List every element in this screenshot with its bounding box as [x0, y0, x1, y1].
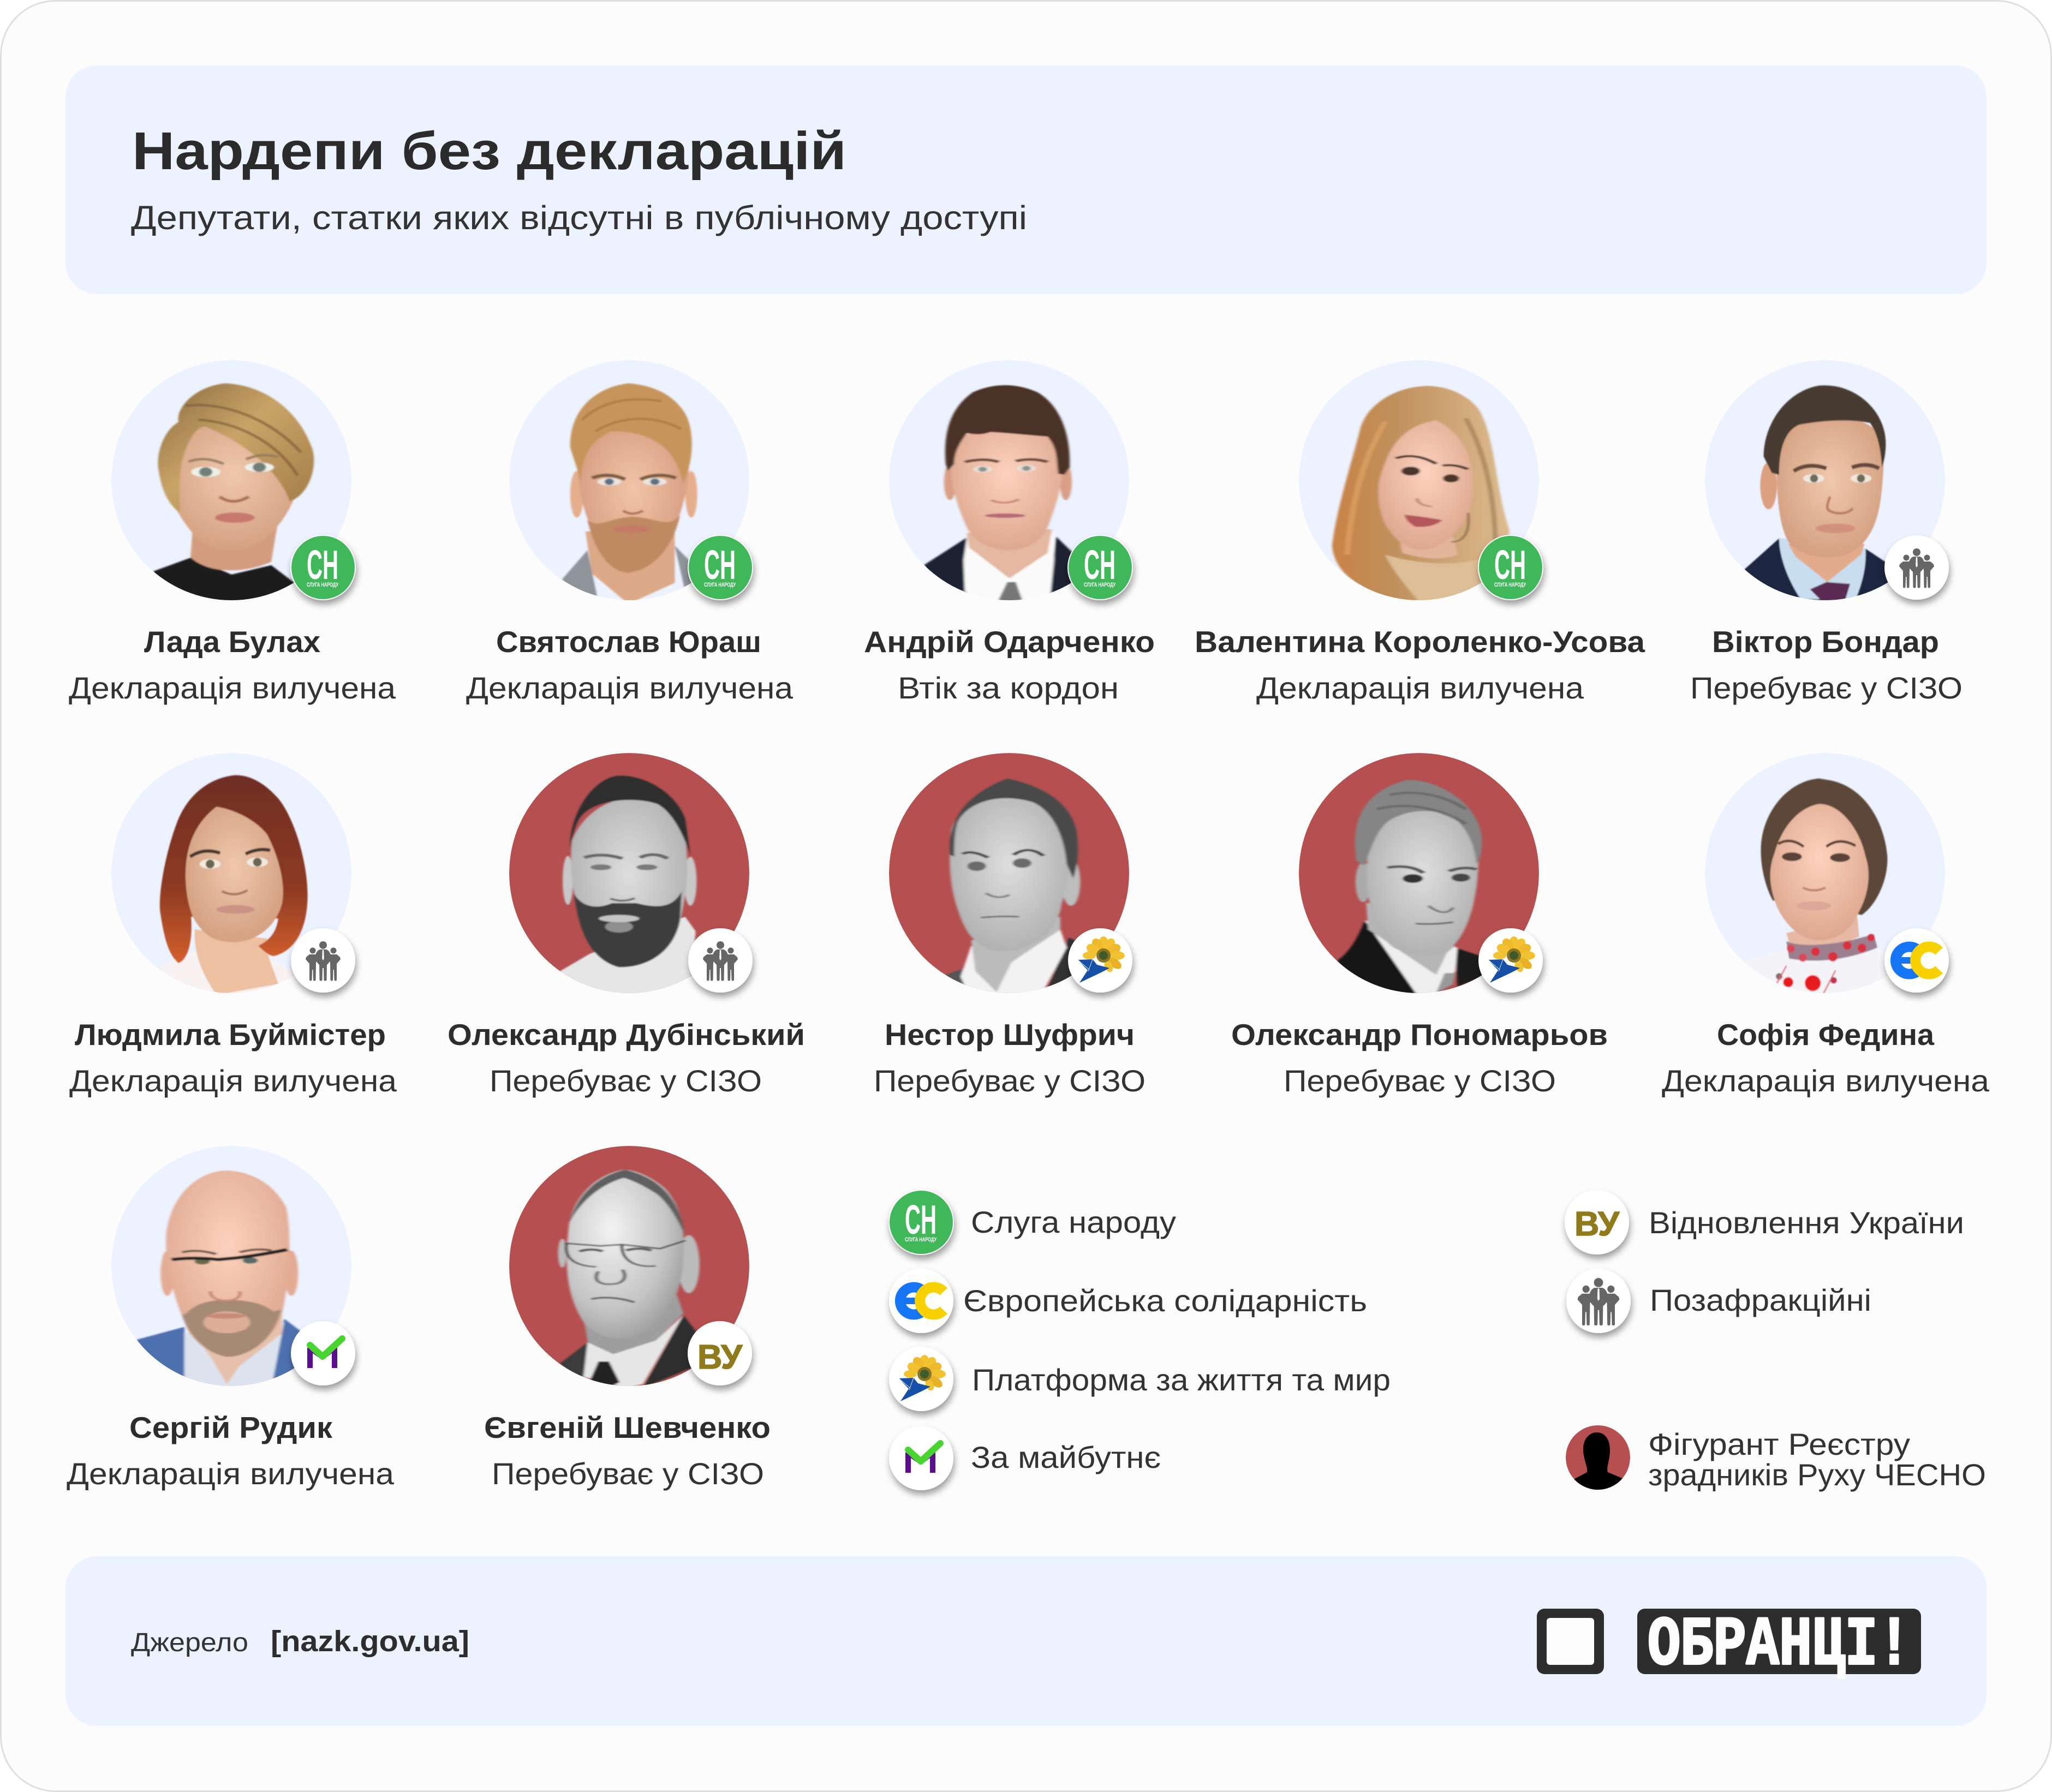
name: Євгеній Шевченко: [484, 1411, 771, 1444]
photo: [111, 753, 351, 995]
legend item: Європейська солідарність: Європейська солідарність: [963, 1283, 1367, 1318]
party badge: Позафракційні: [291, 928, 355, 993]
person: Лада Булах: [69, 360, 396, 705]
source link: [nazk.gov.ua]: [271, 1625, 469, 1658]
legend item: За майбутнє: За майбутнє: [971, 1440, 1161, 1474]
status: Декларація вилучена: [67, 1456, 395, 1491]
status: Декларація вилучена: [69, 671, 396, 705]
party badge: Слуга народу: СЛУГА НАРОДУ: [1084, 582, 1116, 588]
party badge: Слуга народу: СН: [1084, 542, 1116, 588]
name: Андрій Одарченко: [864, 625, 1155, 659]
legend item: За майбутнє: [889, 1426, 1161, 1490]
party badge: Слуга народу: СЛУГА НАРОДУ: [704, 582, 736, 588]
photo: [1705, 360, 1945, 602]
photo: [1299, 753, 1539, 995]
photo: [111, 360, 351, 606]
legend item: Платформа за життя та мир: Платформа за життя та мир: [972, 1363, 1391, 1397]
logo wordmark: ОБРАНЦІ!: [1648, 1606, 1911, 1685]
status: Декларація вилучена: [1662, 1064, 1990, 1098]
legend item: Слуга народу: Слуга народу: [971, 1205, 1176, 1239]
name: Святослав Юраш: [496, 625, 761, 659]
person: Нестор Шуфрич: [874, 753, 1146, 1098]
person: Віктор Бондар: [1690, 360, 1962, 705]
legend item: Платформа за життя та мир: [889, 1347, 1391, 1411]
status: Перебуває у СІЗО: [1690, 671, 1962, 705]
status: Втік за кордон: [898, 671, 1119, 705]
legend item: Позафракційні: Позафракційні: [1650, 1283, 1871, 1317]
person: Олександр Пономарьов: [1231, 753, 1608, 1098]
party badge: Слуга народу: СН: [704, 542, 736, 588]
person: Валентина Короленко-Усова: [1195, 360, 1645, 705]
status: Перебуває у СІЗО: [492, 1456, 764, 1491]
photo: [509, 360, 749, 604]
person: Людмила Буймістер: [69, 753, 397, 1098]
legend item: Відновлення України: Відновлення України: [1649, 1205, 1964, 1240]
status: Перебуває у СІЗО: [874, 1064, 1146, 1098]
photo: [509, 1146, 749, 1388]
legend item: Відновлення України: ВУ: [1574, 1205, 1620, 1243]
legend item: Слуга народу: СН: [905, 1197, 936, 1243]
photo: [1299, 360, 1539, 602]
party badge: Слуга народу: [688, 535, 753, 600]
legend item: Слуга народу: СЛУГА НАРОДУ: [905, 1237, 936, 1243]
party badge: Слуга народу: [1478, 535, 1543, 600]
party badge: Відновлення України: [688, 1321, 752, 1385]
party badge: Слуга народу: СН: [1494, 542, 1526, 588]
person: Євгеній Шевченко: [484, 1146, 771, 1491]
photo: [889, 753, 1129, 995]
party badge: Платформа за життя та мир: [1478, 928, 1543, 993]
name: Валентина Короленко-Усова: [1195, 625, 1645, 659]
legend: [889, 1190, 1986, 1492]
party badge: Відновлення України: ВУ: [697, 1339, 743, 1376]
photo: [509, 753, 749, 995]
party badge: Позафракційні: [688, 928, 753, 993]
photo: [111, 1146, 351, 1388]
person: Софія Федина: [1662, 753, 1990, 1098]
legend item: Відновлення України: [1565, 1190, 1964, 1255]
name: Лада Булах: [144, 625, 320, 659]
legend item: Фігурант Реєстру зрадників Руху ЧЕСНО: Фігурант Реєстру: [1648, 1427, 1910, 1461]
title: Нардепи без декларацій: [132, 121, 846, 181]
name: Софія Федина: [1717, 1018, 1934, 1052]
status: Декларація вилучена: [69, 1064, 397, 1098]
name: Віктор Бондар: [1712, 625, 1939, 659]
name: Олександр Дубінський: [448, 1018, 805, 1052]
source label: Джерело: [131, 1628, 248, 1657]
legend item: Слуга народу: [889, 1190, 1176, 1255]
photo: [889, 360, 1129, 602]
name: Сергій Рудик: [129, 1411, 332, 1444]
footer panel: [65, 1556, 1987, 1726]
legend item: Фігурант Реєстру зрадників Руху ЧЕСНО: зрадників Руху ЧЕСНО: [1648, 1458, 1986, 1492]
party badge: Європейська солідарність: [1884, 928, 1949, 993]
subtitle: Депутати, статки яких відсутні в публічному доступі: [131, 199, 1027, 236]
party badge: Слуга народу: СН: [307, 542, 338, 588]
status: Перебуває у СІЗО: [1284, 1064, 1556, 1098]
name: Нестор Шуфрич: [885, 1018, 1135, 1052]
party badge: Слуга народу: СЛУГА НАРОДУ: [1494, 582, 1526, 588]
party badge: Слуга народу: СЛУГА НАРОДУ: [307, 582, 338, 588]
person: Сергій Рудик: [67, 1146, 395, 1491]
party badge: Позафракційні: [1884, 535, 1949, 600]
legend item: Фігурант Реєстру зрадників Руху ЧЕСНО: [1566, 1425, 1986, 1492]
name: Людмила Буймістер: [75, 1018, 386, 1052]
party badge: Платформа за життя та мир: [1068, 928, 1132, 993]
party badge: За майбутнє: [291, 1321, 355, 1385]
logo mark: [1537, 1609, 1604, 1674]
party badge: Слуга народу: [1068, 535, 1132, 600]
legend item: Європейська солідарність: [889, 1269, 1367, 1333]
legend item: Позафракційні: [1566, 1269, 1871, 1333]
status: Перебуває у СІЗО: [490, 1064, 762, 1098]
person: Святослав Юраш: [466, 360, 794, 705]
name: Олександр Пономарьов: [1231, 1018, 1608, 1052]
status: Декларація вилучена: [466, 671, 794, 705]
person: Андрій Одарченко: [864, 360, 1155, 705]
header panel: [65, 65, 1987, 294]
photo: [1705, 753, 1945, 995]
party badge: Слуга народу: [291, 535, 355, 600]
person: Олександр Дубінський: [448, 753, 805, 1098]
status: Декларація вилучена: [1256, 671, 1584, 705]
